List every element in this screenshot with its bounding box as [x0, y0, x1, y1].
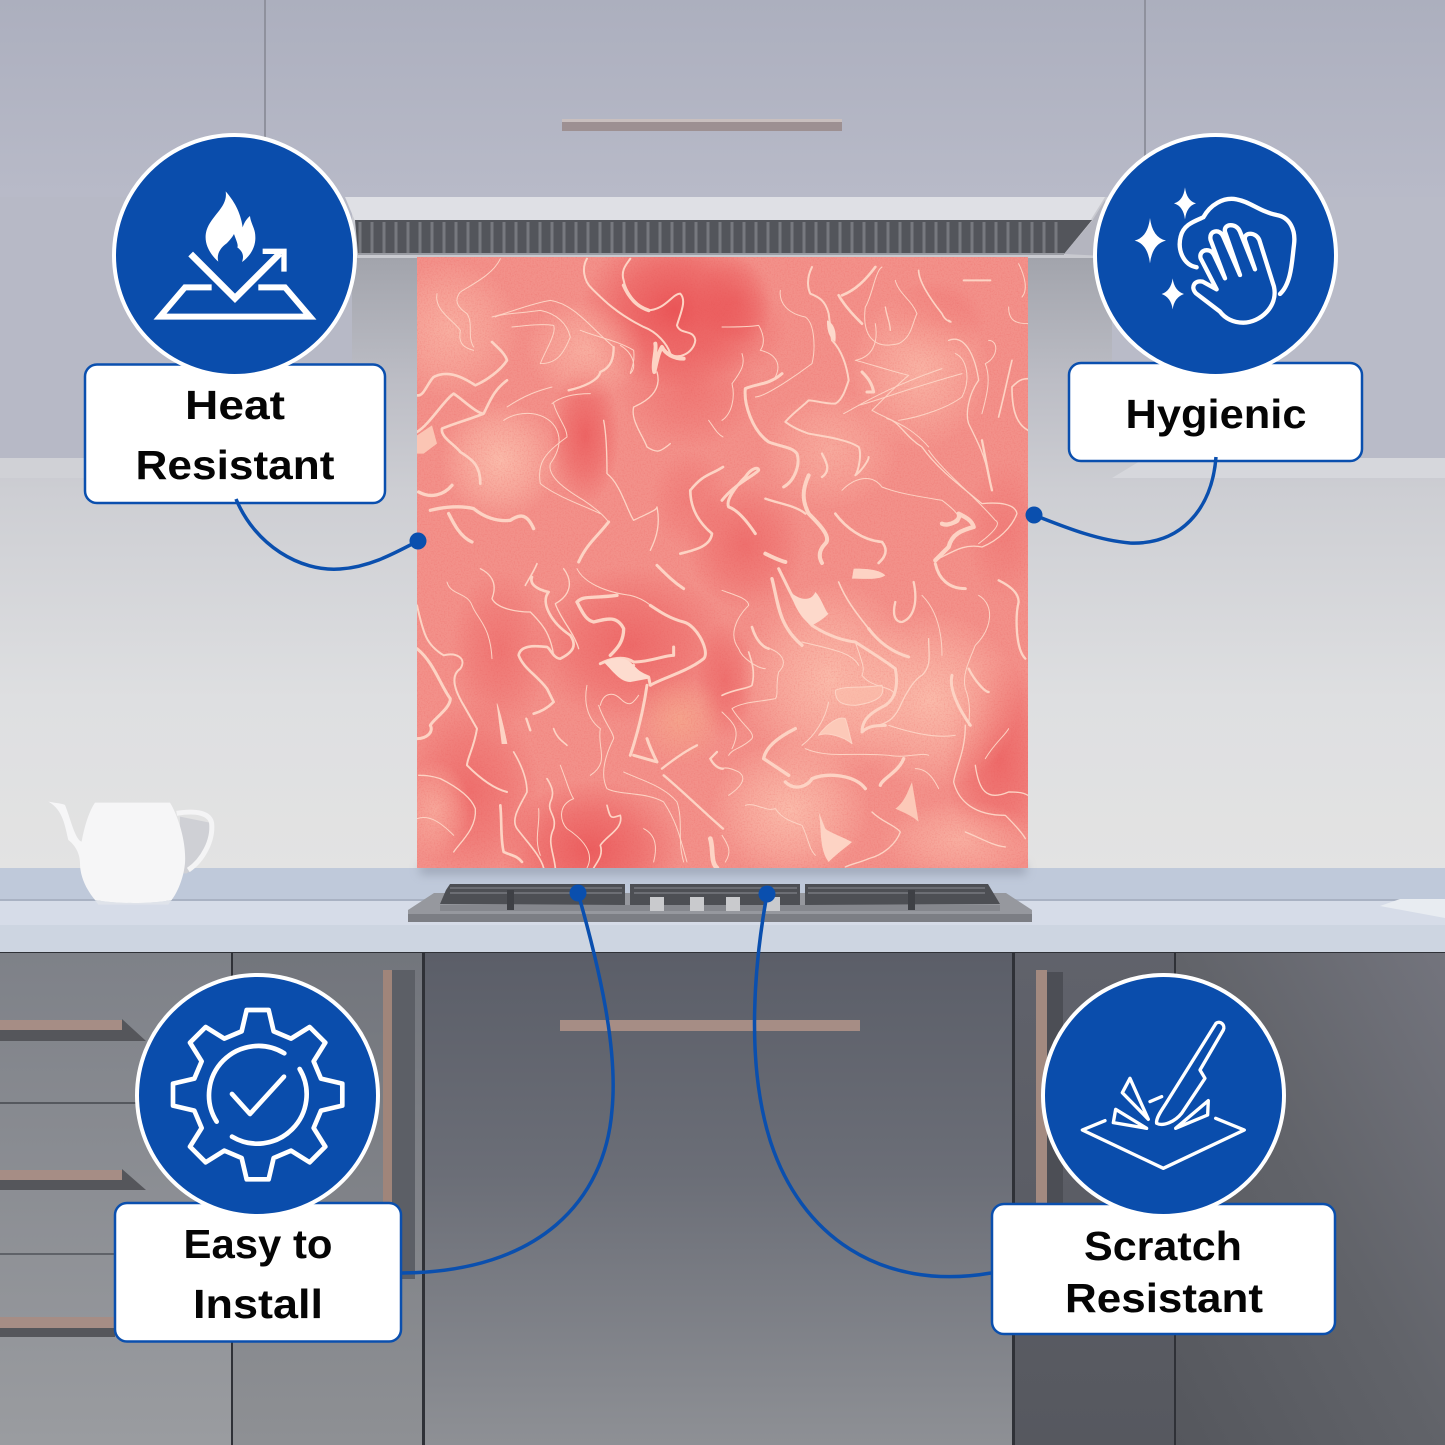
feature: heat resistant [85, 135, 385, 503]
marble splashback panel [417, 257, 1028, 868]
lower cabinets [0, 952, 1445, 1445]
connector: heat resistant [236, 499, 426, 569]
icon: hand wiping with sparkles [1135, 187, 1294, 323]
badge [137, 975, 378, 1216]
connector: hygienic [1026, 457, 1216, 543]
badge [114, 135, 355, 376]
badge [1095, 135, 1336, 376]
wall [0, 258, 1445, 870]
feature: easy to install [115, 975, 401, 1342]
feature: scratch resistant [992, 975, 1335, 1334]
veins: top-left quadrant [417, 259, 723, 562]
extractor hood [345, 197, 1105, 256]
label text: Easy to [184, 1221, 332, 1267]
feature: hygienic [1069, 135, 1362, 461]
upper cabinets [0, 0, 1445, 478]
upper cabinet handle [562, 119, 842, 131]
label box [992, 1204, 1335, 1334]
gas hob [408, 884, 1032, 922]
veins: bottom-left quadrant [417, 564, 723, 868]
icon: knife scratching surface [1082, 1022, 1244, 1168]
icon: gear with check [173, 1010, 342, 1179]
label text: Scratch [1084, 1223, 1242, 1269]
countertop [0, 868, 1445, 953]
label text second line: Resistant [1065, 1275, 1263, 1321]
panel shadow [420, 864, 1026, 874]
veins: bottom-right quadrant [722, 564, 1028, 867]
icon: flame on surface [160, 191, 310, 317]
label box [85, 364, 385, 503]
connector: easy to install [402, 884, 613, 1273]
badge [1043, 975, 1284, 1216]
label text second line: Install [193, 1281, 323, 1327]
label text second line: Resistant [136, 442, 335, 488]
label text: Heat [185, 382, 285, 428]
label text: Hygienic [1126, 391, 1306, 437]
teapot [48, 802, 213, 905]
colour blotches [380, 230, 1055, 920]
connector: scratch resistant [755, 886, 991, 1277]
cabinet handles [0, 970, 1063, 1337]
veins: top-right quadrant [722, 264, 1028, 563]
label box [115, 1203, 401, 1342]
label box [1069, 363, 1362, 461]
